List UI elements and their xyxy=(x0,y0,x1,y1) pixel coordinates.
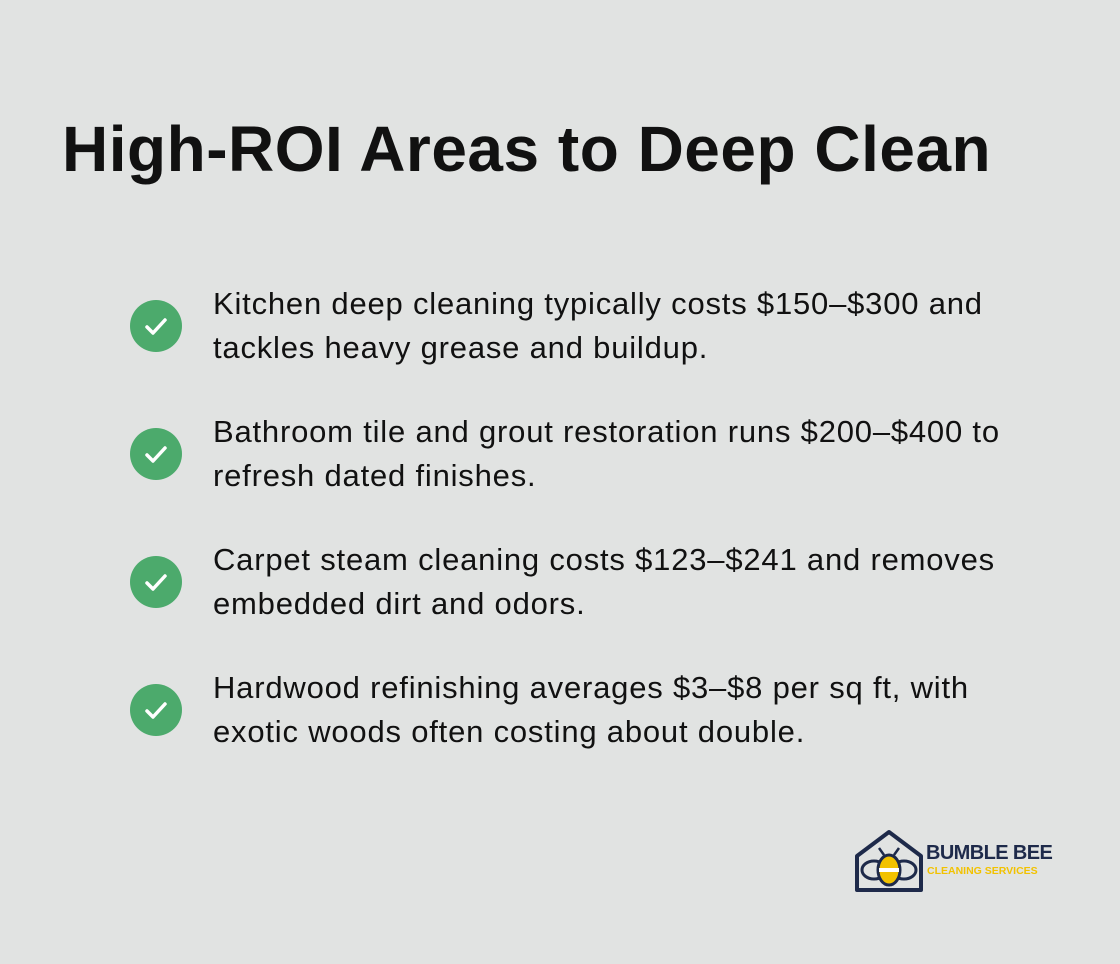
text: tackles heavy grease and buildup. xyxy=(213,330,708,365)
item: kitchen xyxy=(130,286,983,365)
text xyxy=(213,670,969,749)
text xyxy=(213,414,1000,493)
logo: CLEANING SERVICES xyxy=(927,865,1038,877)
text: Kitchen deep cleaning typically costs $150–$300 and xyxy=(213,286,983,321)
icon: check xyxy=(130,428,182,480)
icon: check xyxy=(130,300,182,352)
text: Hardwood refinishing averages $3–$8 per sq ft, with xyxy=(213,670,969,705)
icon: bee house xyxy=(855,830,923,892)
text: Carpet steam cleaning costs $123–$241 and removes xyxy=(213,542,995,577)
text: refresh dated finishes. xyxy=(213,458,536,493)
item: carpet xyxy=(130,542,995,621)
text: embedded dirt and odors. xyxy=(213,586,586,621)
text xyxy=(213,286,983,365)
icon: check xyxy=(130,556,182,608)
logo xyxy=(855,830,1052,892)
text xyxy=(213,542,995,621)
text: Bathroom tile and grout restoration runs $200–$400 to xyxy=(213,414,1000,449)
item: hardwood xyxy=(130,670,969,749)
title: High-ROI Areas to Deep Clean xyxy=(62,113,991,185)
logo text: BUMBLE BEE xyxy=(926,842,1052,864)
icon: check xyxy=(130,684,182,736)
text: exotic woods often costing about double. xyxy=(213,714,805,749)
item: bathroom xyxy=(130,414,1000,493)
